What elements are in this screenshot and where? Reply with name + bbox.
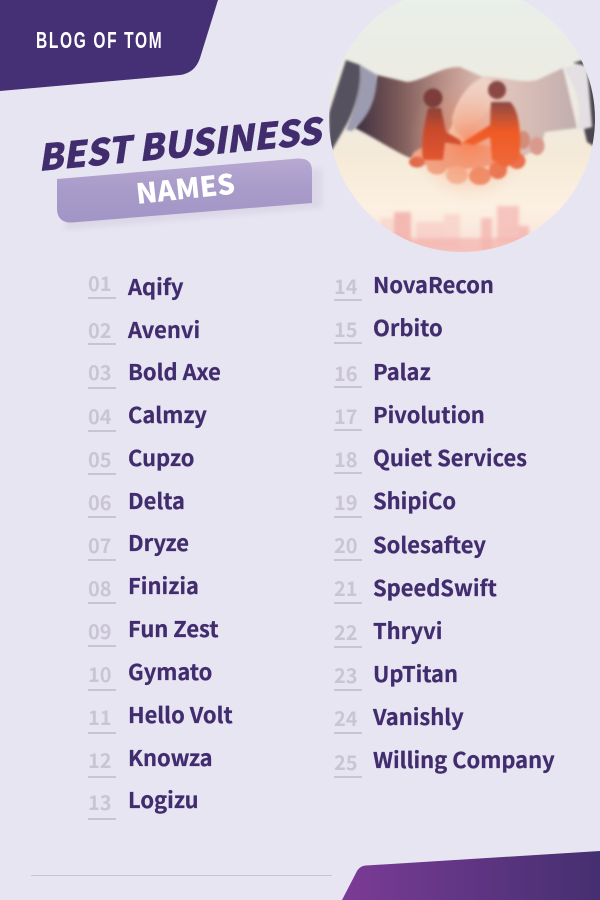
item 15 xyxy=(334,312,443,344)
brand name: BLOG OF TOM xyxy=(36,27,163,53)
item 14: 14 xyxy=(334,271,358,300)
item 19 xyxy=(334,485,456,518)
thumb xyxy=(451,80,493,122)
item 14: NovaRecon xyxy=(373,269,494,300)
item 05: 05 xyxy=(88,444,112,473)
item 22: 22 xyxy=(334,617,358,646)
item 13: Logizu xyxy=(128,784,199,815)
item 10: 10 xyxy=(88,659,112,688)
item 20: 20 xyxy=(334,530,358,559)
orange glow xyxy=(416,89,512,194)
item 06: 06 xyxy=(88,487,112,516)
item 02: 02 xyxy=(88,315,112,344)
item 16 xyxy=(334,356,431,388)
item 16: Palaz xyxy=(373,356,431,387)
item 11: Hello Volt xyxy=(128,699,233,730)
right hand xyxy=(454,68,577,165)
item 24 xyxy=(334,701,464,734)
item 24: 24 xyxy=(334,703,358,732)
left hand xyxy=(355,67,483,158)
item 24: Vanishly xyxy=(373,701,464,732)
top-left brand banner xyxy=(0,0,218,91)
item 03: Bold Axe xyxy=(128,356,221,387)
item 21: 21 xyxy=(334,573,358,602)
item 04 xyxy=(88,399,207,432)
subtitle text: NAMES xyxy=(134,163,237,213)
names list: right column xyxy=(334,269,555,778)
item 06: Delta xyxy=(128,485,185,516)
item 16: 16 xyxy=(334,358,358,387)
item 13: 13 xyxy=(88,787,112,816)
item 01: 01 xyxy=(88,268,112,297)
item 05: Cupzo xyxy=(128,442,195,473)
handshake photo in circle xyxy=(329,0,595,252)
item 08: Finizia xyxy=(128,570,199,601)
item 10 xyxy=(88,656,212,691)
clasped fingers xyxy=(409,131,544,185)
title: best business: BEST BUSINESS xyxy=(35,103,323,182)
item 17: Pivolution xyxy=(373,399,485,430)
item 25: Willing Company xyxy=(373,744,555,775)
left cuff xyxy=(346,65,377,131)
item 07: 07 xyxy=(88,530,112,559)
item 03: 03 xyxy=(88,357,112,386)
item 04: Calmzy xyxy=(128,399,207,430)
item 02 xyxy=(88,314,200,345)
silhouette: right person xyxy=(462,81,520,168)
item 22 xyxy=(334,615,442,648)
item 01 xyxy=(88,268,184,302)
footer rule xyxy=(31,875,332,876)
item 17: 17 xyxy=(334,401,358,430)
item 19: ShipiCo xyxy=(373,485,456,516)
item 18: Quiet Services xyxy=(373,442,527,473)
item 20: Solesaftey xyxy=(373,529,486,560)
item 12: Knowza xyxy=(128,742,213,773)
item 15: Orbito xyxy=(373,312,443,343)
right cuff xyxy=(566,66,590,129)
item 07: Dryze xyxy=(128,527,189,558)
item 02: Avenvi xyxy=(128,314,200,345)
item 04: 04 xyxy=(88,401,112,430)
left sleeve xyxy=(329,60,360,150)
city skyline xyxy=(380,206,530,254)
item 19: 19 xyxy=(334,487,358,516)
item 11 xyxy=(88,699,233,734)
item 22: Thryvi xyxy=(373,615,442,646)
silhouette: left person xyxy=(422,88,462,160)
item 13 xyxy=(88,784,199,820)
item 07 xyxy=(88,527,189,561)
footer banner xyxy=(342,851,600,900)
item 09: Fun Zest xyxy=(128,613,219,644)
item 12: 12 xyxy=(88,745,112,774)
item 10: Gymato xyxy=(128,656,212,687)
item 23: UpTitan xyxy=(373,658,458,689)
item 23 xyxy=(334,658,458,691)
item 18: 18 xyxy=(334,444,358,473)
item 06 xyxy=(88,485,185,518)
item 01: Aqify xyxy=(128,271,184,302)
item 21: SpeedSwift xyxy=(373,572,497,603)
item 08 xyxy=(88,570,199,604)
item 09: 09 xyxy=(88,616,112,645)
item 05 xyxy=(88,442,195,475)
item 09 xyxy=(88,613,219,647)
item 08: 08 xyxy=(88,573,112,602)
right sleeve xyxy=(572,58,595,147)
item 03 xyxy=(88,356,221,389)
subtitle ribbon: names xyxy=(57,158,322,228)
item 25: 25 xyxy=(334,747,358,776)
item 23: 23 xyxy=(334,660,358,689)
item 11: 11 xyxy=(88,702,112,731)
names list: left column xyxy=(88,268,233,820)
item 15: 15 xyxy=(334,314,358,343)
item 12 xyxy=(88,742,213,778)
